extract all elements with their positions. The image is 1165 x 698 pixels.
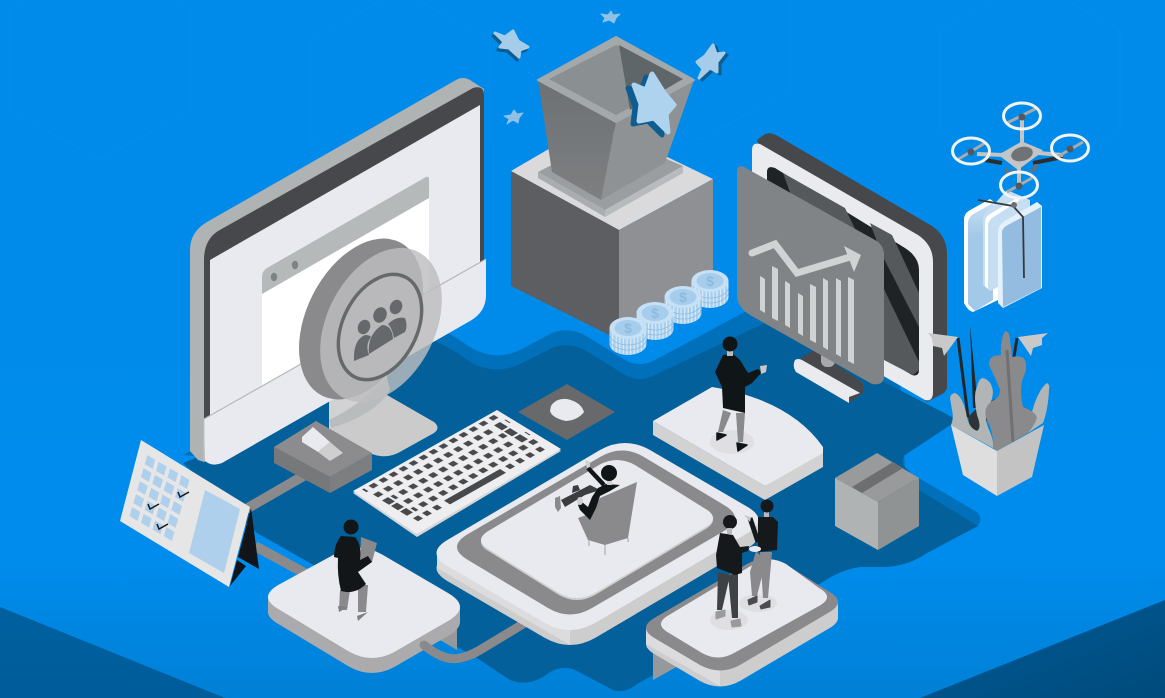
switch box (274, 421, 372, 493)
drone arms (977, 117, 1063, 186)
cable between platforms (424, 621, 528, 659)
rotor rings (952, 103, 1088, 198)
plant stems (958, 325, 1017, 431)
package slab front (998, 202, 1042, 308)
package slab middle (983, 190, 1030, 291)
chart bars (760, 266, 854, 364)
plant leaves (950, 378, 993, 448)
floor shadow: mid blue layer (183, 300, 980, 527)
monitor frame (752, 144, 933, 400)
icon: people (354, 298, 406, 361)
corner band: bottom right (920, 600, 1165, 698)
small platform side (646, 575, 838, 686)
monitor back (757, 133, 947, 402)
star small left (504, 110, 523, 124)
small platform top (661, 560, 827, 658)
coins (610, 270, 728, 355)
monitor screen (767, 167, 919, 375)
plant (928, 325, 1049, 496)
person: in armchair (555, 460, 637, 555)
rocker switch (302, 427, 343, 461)
person: with clipboard (334, 520, 377, 621)
calendar date cells (130, 455, 190, 541)
drone with package (952, 103, 1088, 312)
monitor chin (204, 259, 486, 465)
cardboard box (835, 453, 919, 550)
centre platform (436, 443, 758, 645)
chart panel (737, 166, 884, 384)
coin stack 4: $ (706, 273, 714, 289)
rotor hubs (968, 114, 1074, 190)
small platform rim (646, 559, 838, 670)
browser window (262, 177, 429, 388)
monitor bezel (204, 87, 484, 425)
disc with people icon (274, 218, 466, 423)
coin stack 3: $ (679, 289, 687, 305)
trophy bucket (538, 37, 694, 200)
mouse (550, 399, 584, 421)
star top left (493, 31, 528, 60)
star top small (601, 11, 620, 23)
stand cable left (248, 475, 305, 508)
plant pot (951, 425, 1044, 496)
calendar check marks (148, 492, 189, 529)
monitor screen (210, 105, 480, 417)
package slab back (964, 199, 998, 312)
screen reflections (783, 173, 919, 375)
left platform top (268, 548, 460, 658)
floor shadow: dark layer (183, 322, 978, 691)
calendar (120, 440, 259, 587)
left platform side (268, 563, 460, 673)
plant flags (928, 333, 1048, 356)
mouse pad (518, 384, 615, 440)
person: left colleague (716, 515, 749, 627)
platform inner (481, 460, 713, 598)
centre platform top (436, 443, 758, 630)
trophy base (538, 135, 683, 217)
monitor stand (329, 360, 438, 456)
person: right colleague (744, 500, 778, 609)
trophy stand (511, 37, 713, 340)
keyboard (353, 410, 561, 537)
large monitor (190, 78, 486, 465)
big star (628, 74, 674, 135)
drone body (1001, 143, 1041, 168)
right monitor (737, 133, 947, 403)
small platform (646, 500, 838, 686)
coin stack 1: $ (624, 320, 632, 336)
package (964, 190, 1042, 312)
calendar panel (189, 490, 240, 573)
platform ring (457, 450, 735, 614)
box tape (852, 462, 903, 493)
left platform (268, 520, 460, 673)
stars (493, 11, 727, 135)
chart line (752, 244, 861, 273)
package strap (978, 200, 1024, 278)
star right (697, 45, 727, 80)
coin stack 2: $ (651, 305, 659, 321)
monitor foot (794, 350, 863, 403)
keys (361, 413, 558, 527)
corner band: bottom left (0, 607, 225, 698)
rotor blades (957, 108, 1083, 192)
centre platform side (436, 458, 758, 645)
cube (511, 122, 713, 340)
monitor body (190, 78, 484, 462)
cable to platform (255, 546, 310, 576)
person: standing presenter (715, 336, 767, 451)
quarter platform (653, 336, 823, 500)
